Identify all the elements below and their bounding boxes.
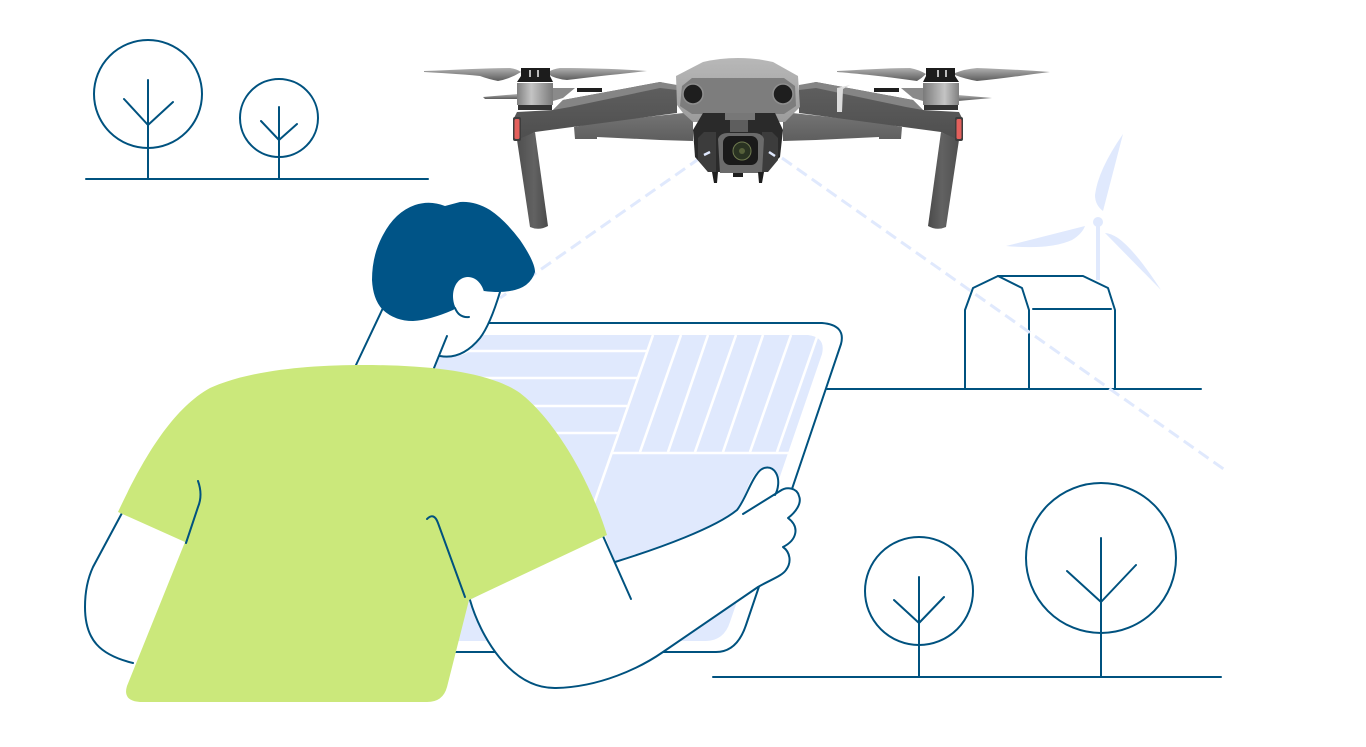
camera housing: [693, 113, 783, 172]
left arm outline: [85, 513, 133, 663]
left propellers: [424, 68, 647, 99]
front sensors: [683, 84, 703, 104]
hair: [372, 202, 535, 321]
sleeve creases: [186, 481, 465, 597]
arm stripe: [837, 85, 850, 112]
thumb: [615, 468, 778, 562]
person: [85, 202, 800, 702]
sight cone dashed lines: [500, 158, 1225, 470]
drone left half: motor, arm, leg: [513, 68, 693, 229]
field grid lines: [440, 335, 817, 515]
neck and face: [356, 270, 500, 369]
barn and ground line: [826, 276, 1201, 389]
lens: [733, 142, 751, 160]
drone: [424, 58, 1050, 229]
landing skids: [712, 172, 764, 183]
tablet frame: [440, 323, 842, 652]
wind turbine: [1006, 134, 1161, 290]
tree group: top left: [86, 40, 428, 179]
tablet: [400, 323, 842, 652]
elbow line: [603, 536, 631, 599]
gimbal camera: [718, 133, 764, 173]
ear: [453, 277, 484, 317]
t-shirt: [118, 365, 607, 702]
camera highlights: [704, 152, 775, 156]
tree group: bottom right: [713, 483, 1221, 677]
drone body: [676, 58, 800, 122]
tablet screen: [400, 335, 823, 641]
drone right half: motor, arm, leg: [783, 68, 963, 229]
right arm and hand: [470, 467, 800, 688]
right propellers: [837, 68, 1050, 101]
